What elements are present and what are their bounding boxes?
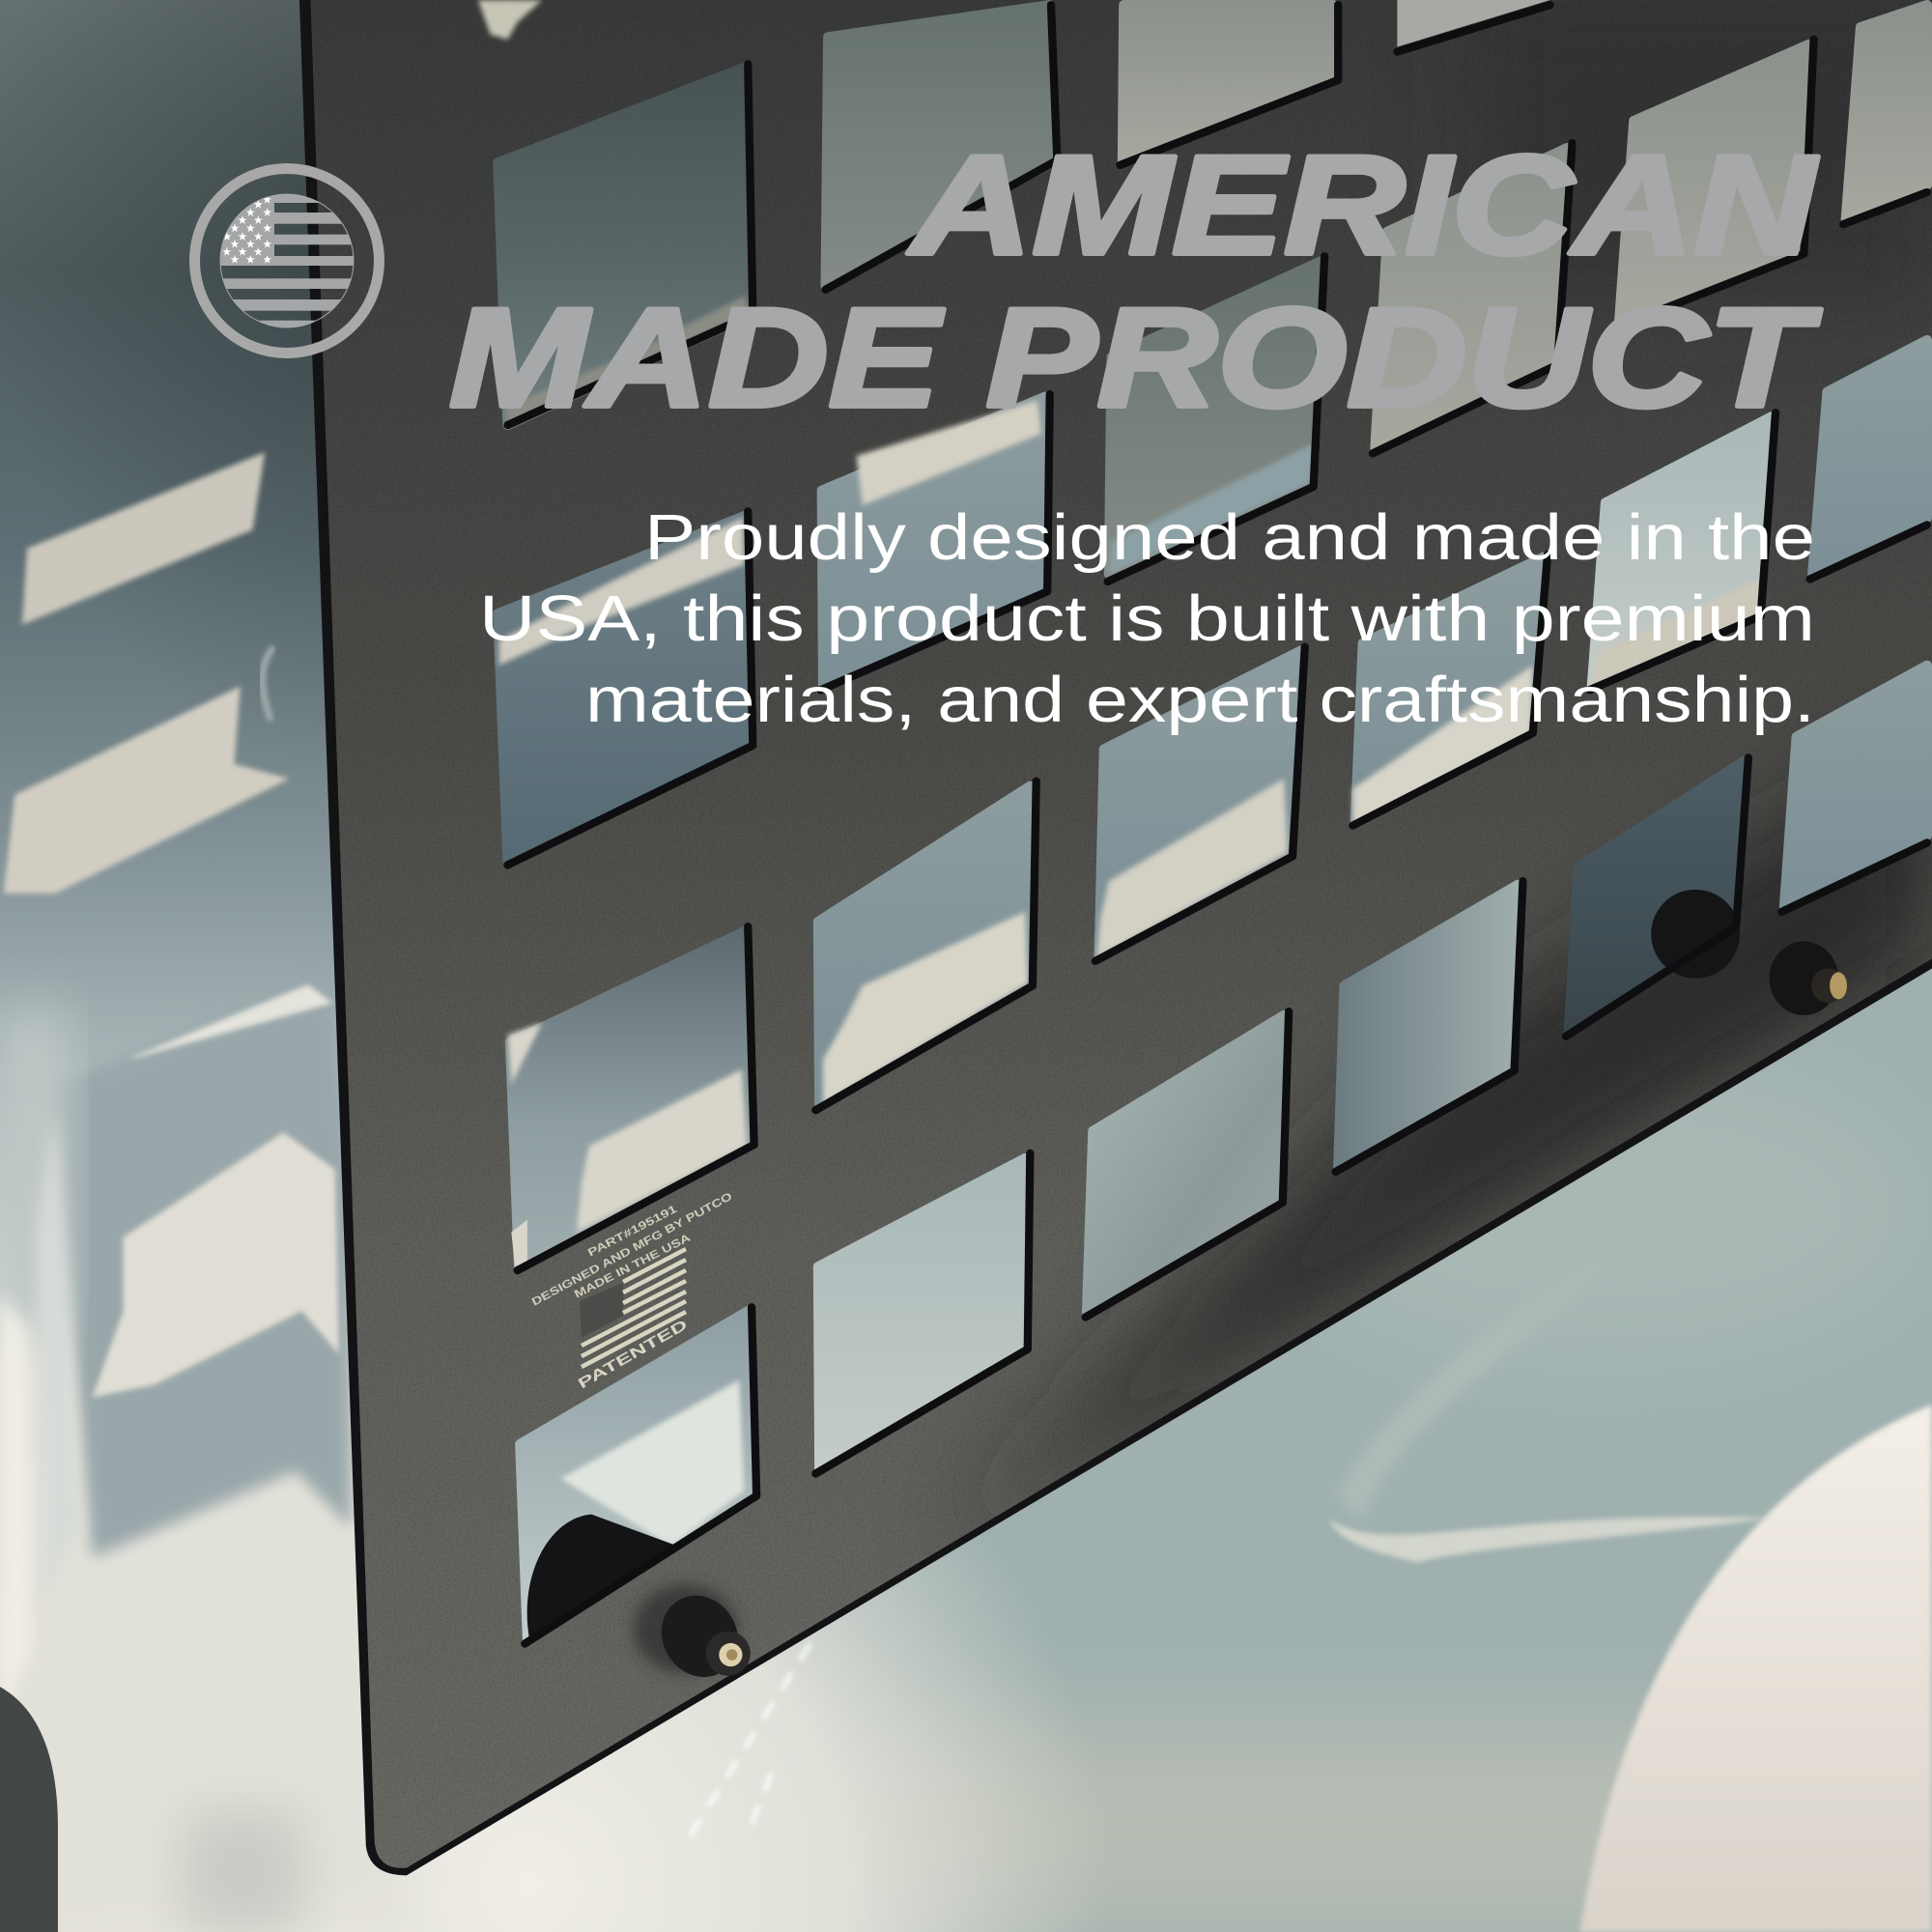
cut-out H: [815, 1153, 1030, 1474]
etched flag: [580, 1249, 686, 1367]
cut-out J: [1108, 256, 1324, 582]
icon: American flag badge: [195, 168, 379, 354]
cut-out D with mounting knob: [520, 1307, 756, 1644]
cut-out S with mounting knob: [1566, 757, 1748, 1037]
cut-out V: [1781, 666, 1927, 912]
description line 1: Proudly designed and made in the: [644, 501, 1815, 574]
blurred smudge top: [478, 0, 542, 40]
title line 2: MADE PRODUCT: [449, 278, 1822, 437]
upper mounting bolt: [1770, 941, 1847, 1015]
warm highlight lower centre: [0, 1306, 1109, 1932]
cut-out E: [826, 5, 1057, 290]
cut-out M: [1397, 0, 1550, 52]
lower edge shading: [966, 770, 1932, 1526]
lower right blue-grey fender: [370, 936, 1932, 1932]
origin line: MADE IN THE USA: [573, 1233, 693, 1301]
description line 3: materials, and expert craftsmanship.: [585, 664, 1815, 736]
left body column: [0, 1331, 407, 1932]
cut-out T: [1843, 5, 1927, 224]
cut-out I: [1120, 5, 1338, 165]
cut-out L: [1086, 1011, 1289, 1318]
cut-out K: [1095, 647, 1305, 961]
cut-out P: [1336, 881, 1523, 1172]
cut-out C: [508, 926, 754, 1270]
reflected shadows left: [55, 974, 352, 1557]
cut-out A: [497, 64, 753, 425]
cut-out N: [1373, 143, 1573, 453]
part number: PART#195191: [586, 1204, 680, 1260]
cut-out B: [497, 511, 753, 865]
cut-out R: [1589, 412, 1776, 690]
cut-out F: [820, 394, 1050, 690]
title: [449, 126, 1822, 437]
patented mark: PATENTED: [576, 1317, 691, 1392]
fastener ring reflection: [263, 647, 273, 721]
maker line: DESIGNED AND MFG BY PUTCO: [530, 1191, 734, 1309]
title line 1: AMERICAN: [907, 126, 1818, 284]
description line 2: USA, this product is built with premium: [479, 582, 1815, 655]
cream light patches left: [22, 452, 265, 625]
cut-out U: [1810, 340, 1927, 579]
cut-out G: [815, 781, 1037, 1110]
plate cut-outs: [497, 0, 1927, 1644]
cut-out Q: [1615, 40, 1814, 327]
dark trim bottom left: [0, 1687, 58, 1932]
cut-out O: [1353, 554, 1548, 826]
white bumper highlight: [1579, 1405, 1932, 1932]
lower mounting bolt: [634, 1581, 753, 1691]
etched plate marking: [530, 1191, 734, 1392]
description text: [479, 501, 1815, 736]
reflection streak: [1328, 1517, 1775, 1562]
